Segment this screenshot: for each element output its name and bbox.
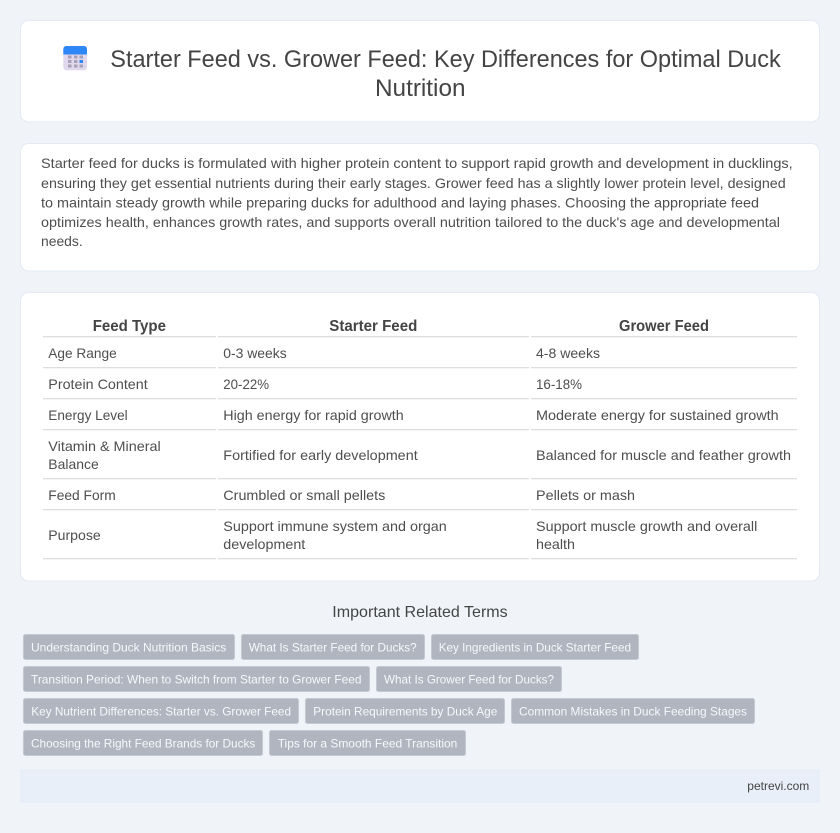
title: Starter Feed vs. Grower Feed: Key Differences for Optimal Duck: [110, 46, 782, 73]
table header row: Feed Type: [93, 318, 166, 335]
text block: summary: [41, 155, 793, 249]
table row: protein content: Protein Content: [48, 376, 148, 392]
tag: transition period: [24, 666, 370, 692]
table row: feed form: [43, 487, 797, 510]
table row: purpose: Support muscle growth and overall: [536, 518, 757, 534]
tag: key nutrient differences: [24, 698, 298, 724]
tag: understanding duck nutrition basics: Understanding Duck Nutrition Basics: [31, 640, 226, 654]
tag: key ingredients: [432, 634, 638, 660]
table row: feed form: Pellets or mash: [536, 487, 635, 503]
tag: smooth feed transition: [270, 730, 466, 756]
tag: what is starter feed: [242, 634, 424, 660]
table header row: [43, 318, 797, 337]
tag: choosing feed brands: Choosing the Right Feed Brands for Ducks: [31, 736, 255, 750]
table header row: Grower Feed: [619, 318, 709, 335]
table row: purpose: [43, 518, 797, 559]
table row: vitamin and mineral balance: Balanced for muscle and feather growth: [536, 447, 791, 463]
tag: what is starter feed: What Is Starter Feed for Ducks?: [249, 640, 417, 654]
table row: energy level: Energy Level: [48, 407, 128, 423]
text block: summary: to maintain steady growth while preparing ducks for adulthood and laying phases. Choosing the appropriate feed: [41, 194, 759, 210]
tag: key ingredients: Key Ingredients in Duck Starter Feed: [439, 640, 631, 654]
table row: age range: 0-3 weeks: [223, 345, 287, 361]
tag: protein requirements: Protein Requirements by Duck Age: [313, 704, 498, 718]
table row: vitamin and mineral balance: Balance: [48, 456, 99, 472]
tag: choosing feed brands: [24, 730, 262, 756]
footer bar: petrevi.com: [747, 779, 809, 793]
tag: common mistakes: Common Mistakes in Duck Feeding Stages: [519, 704, 747, 718]
tag: key nutrient differences: Key Nutrient Differences: Starter vs. Grower Feed: [31, 704, 291, 718]
table row: protein content: [43, 376, 797, 399]
title: Nutrition: [375, 75, 466, 102]
related terms tags: [24, 634, 754, 756]
table row: feed form: Feed Form: [48, 487, 116, 503]
panel: comparison table: [20, 292, 820, 581]
tag: common mistakes: [512, 698, 754, 724]
table row: feed form: Crumbled or small pellets: [223, 487, 385, 503]
tag: what is grower feed: What Is Grower Feed for Ducks?: [384, 672, 554, 686]
table row: energy level: High energy for rapid growth: [223, 407, 404, 423]
table row: purpose: development: [223, 536, 305, 552]
footer bar: [20, 769, 820, 803]
heading: important related terms: Important Related Terms: [332, 604, 508, 621]
text block: summary: ensuring they get essential nutrients during their early stages. Grower feed has a slightly lower protein level, designed: [41, 175, 786, 191]
text block: summary: Starter feed for ducks is formulated with higher protein content to support rapid growth and development in ducklings,: [41, 155, 793, 171]
tag: what is grower feed: [376, 666, 562, 692]
table row: protein content: 16-18%: [536, 376, 582, 392]
table row: age range: 4-8 weeks: [536, 345, 600, 361]
table row: energy level: Moderate energy for sustained growth: [536, 407, 779, 423]
table row: vitamin and mineral balance: Fortified for early development: [223, 447, 418, 463]
table row: age range: Age Range: [48, 345, 117, 361]
tag: smooth feed transition: Tips for a Smooth Feed Transition: [278, 736, 457, 750]
table header row: Starter Feed: [329, 318, 417, 335]
tag: transition period: Transition Period: When to Switch from Starter to Grower Feed: [31, 672, 362, 686]
tag: protein requirements: [306, 698, 504, 724]
panel: header: [20, 20, 820, 122]
tag: understanding duck nutrition basics: [24, 634, 234, 660]
table row: protein content: 20-22%: [223, 376, 269, 392]
table row: purpose: Purpose: [48, 527, 101, 543]
panel: summary text: [20, 144, 820, 271]
table row: vitamin and mineral balance: Vitamin & Mineral: [48, 438, 161, 454]
table row: vitamin and mineral balance: [43, 438, 797, 479]
text block: summary: needs.: [41, 233, 83, 249]
table row: energy level: [43, 407, 797, 430]
table row: age range: [43, 345, 797, 368]
icon: calendar: [63, 46, 87, 70]
title: [110, 46, 782, 102]
table row: purpose: health: [536, 536, 575, 552]
table row: purpose: Support immune system and organ: [223, 518, 447, 534]
text block: summary: optimizes health, enhances growth rates, and supports overall nutrition tailored to the duck's age and developmental: [41, 214, 780, 230]
